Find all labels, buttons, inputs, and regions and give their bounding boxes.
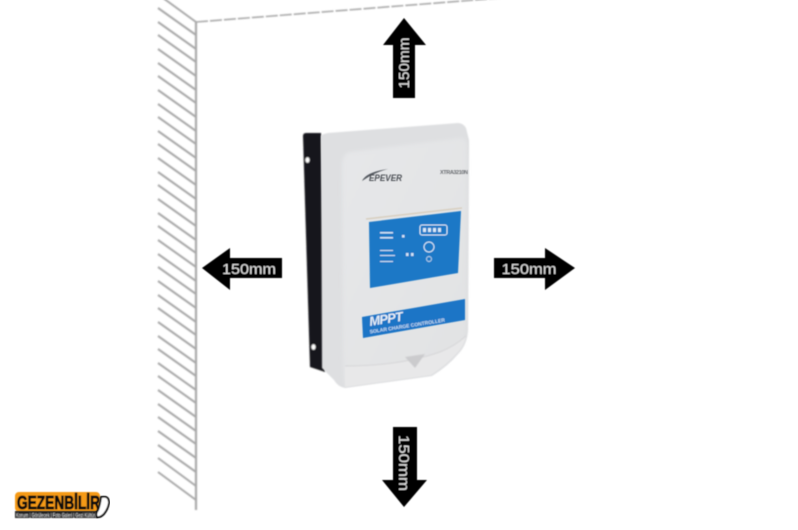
blue MPPT band: SOLAR CHARGE CONTROLLER: [369, 318, 446, 335]
right arrow: 150mm: 150mm: [502, 261, 556, 278]
logo: Gezenbilir: [15, 492, 109, 519]
blue MPPT band: [362, 299, 465, 338]
brand logo EPEVER: [362, 169, 402, 183]
bottom arrow: 150mm: [382, 427, 427, 507]
logo tagline: Konum | Görülecek | Foto Galeri | Gezi Kültürü: [16, 513, 97, 519]
mounting bracket: [303, 133, 325, 372]
brand logo EPEVER: EPEVER: [369, 173, 402, 183]
bottom arrow: 150mm: 150mm: [395, 435, 412, 491]
top arrow: 150mm: 150mm: [396, 38, 413, 88]
wall with hatching: [158, 0, 500, 510]
blue MPPT band: MPPT: [368, 309, 405, 329]
controller body: [321, 123, 469, 388]
logo wordmark: GEZENBİLİR: [17, 493, 100, 513]
right arrow: 150mm: [494, 248, 575, 290]
left arrow: 150mm: [202, 248, 282, 290]
blue control panel: [366, 208, 462, 288]
top arrow: 150mm: [383, 18, 426, 98]
icon: footprint: [96, 497, 109, 517]
solar charge controller device: [303, 123, 469, 388]
model number: XTRA3210N: [440, 170, 468, 176]
left arrow: 150mm: 150mm: [222, 261, 276, 278]
